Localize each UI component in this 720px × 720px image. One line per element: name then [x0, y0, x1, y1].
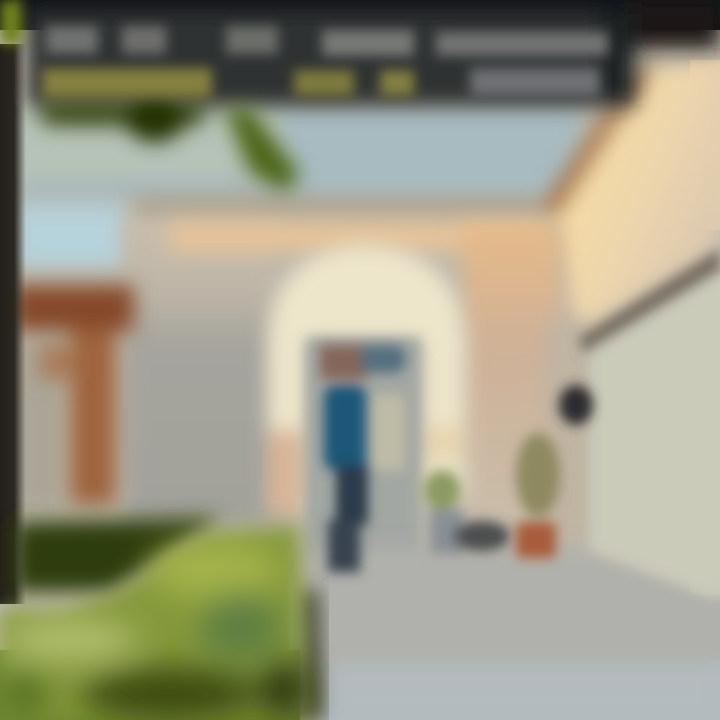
- title banner: [0, 0, 720, 106]
- doorway: [306, 338, 420, 560]
- upper right wall: [535, 60, 720, 335]
- shrub highlights and shadows: [0, 542, 309, 720]
- foreground shrubs: [0, 525, 305, 720]
- arched entrance: [268, 245, 465, 515]
- left wall: [14, 215, 275, 525]
- top left leaf: [0, 0, 22, 44]
- ground: [305, 550, 720, 720]
- sky and background: [10, 105, 580, 267]
- wooden structure: [12, 285, 134, 505]
- dark hedge: [14, 518, 220, 592]
- title text, illegible in the reference: [42, 26, 608, 98]
- eaves: [135, 198, 545, 252]
- wall lamp: [559, 385, 593, 425]
- right wall: [462, 225, 590, 545]
- small plant: [423, 470, 464, 554]
- left tree trunk: [0, 44, 26, 604]
- garage door: [578, 248, 720, 600]
- shadow beside shrubs: [300, 590, 322, 720]
- potted plant: [516, 433, 560, 558]
- dark object on ground: [454, 521, 510, 551]
- person on a ladder: [320, 345, 406, 572]
- hanging leaves: [40, 94, 300, 192]
